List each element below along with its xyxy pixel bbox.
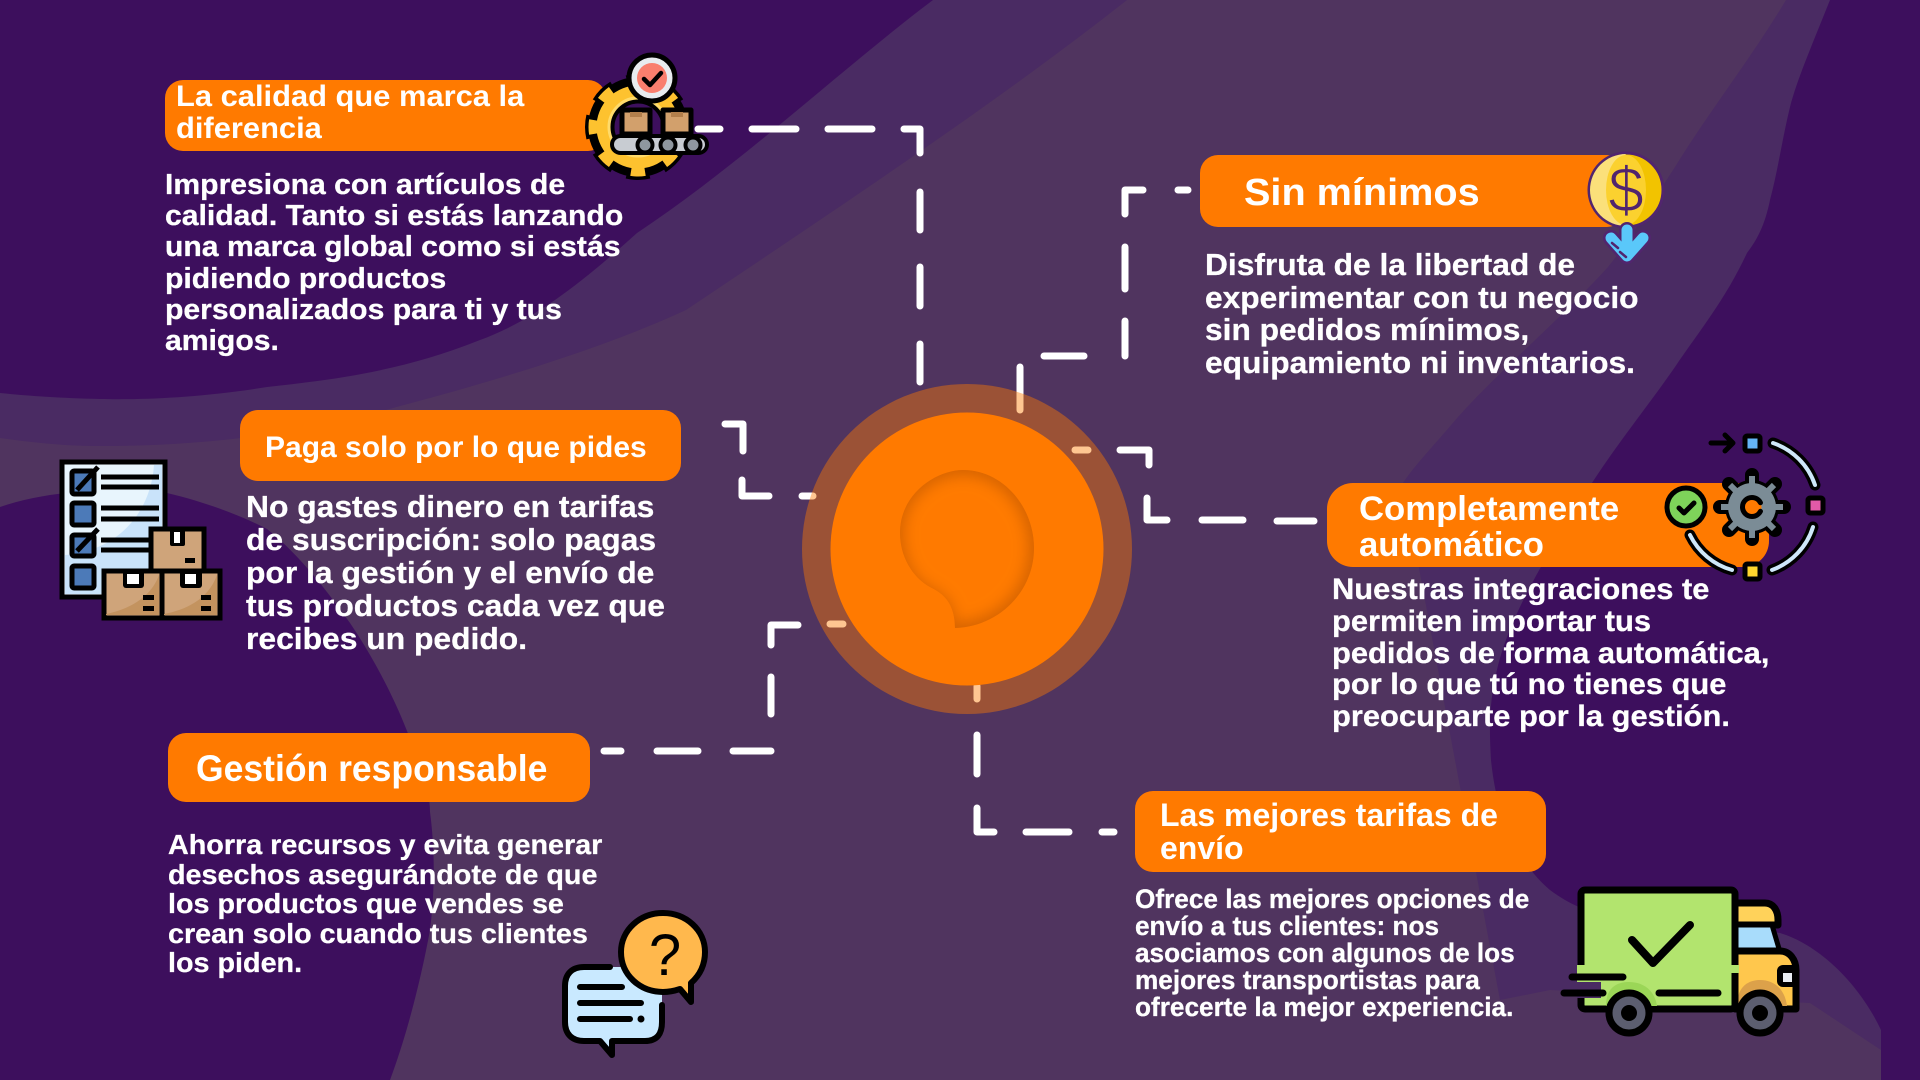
inner disc xyxy=(830,412,1104,686)
body text: crean solo cuando tus clientes xyxy=(168,918,588,949)
icon: chat bubbles: ? xyxy=(649,923,681,988)
connector: calidad to centre xyxy=(694,126,924,386)
heading: Gestión responsable xyxy=(196,748,547,789)
speech bubble mark xyxy=(900,470,1034,628)
body text: pidiendo productos xyxy=(165,263,446,295)
panel: gestion xyxy=(168,733,708,1058)
body text: Ofrece las mejores opciones de xyxy=(1135,884,1529,914)
heading: envío xyxy=(1160,830,1244,866)
body text: equipamiento ni inventarios. xyxy=(1205,345,1635,380)
connector: automatico to centre xyxy=(1072,446,1318,524)
body text: experimentar con tu negocio xyxy=(1205,280,1639,315)
body text: una marca global como si estás xyxy=(165,231,620,263)
icon: checklist and boxes xyxy=(60,460,222,620)
body text xyxy=(1135,884,1529,1022)
icon: conveyor gear xyxy=(585,52,709,180)
body text: mejores transportistas para xyxy=(1135,965,1480,995)
heading: Completamente xyxy=(1359,490,1619,528)
panel: calidad xyxy=(165,52,709,357)
body text: sin pedidos mínimos, xyxy=(1205,312,1529,347)
heading bar xyxy=(168,733,590,802)
icon: delivery truck xyxy=(1560,886,1800,1036)
body text: por la gestión y el envío de xyxy=(246,556,654,590)
heading bar xyxy=(1200,155,1625,227)
body text: No gastes dinero en tarifas xyxy=(246,490,654,524)
body text: permiten importar tus xyxy=(1332,605,1651,638)
connector: sin minimos to centre xyxy=(1016,186,1192,414)
heading: automático xyxy=(1359,526,1544,564)
heading xyxy=(1359,490,1619,564)
body text: pedidos de forma automática, xyxy=(1332,637,1769,670)
connector: tarifas to centre xyxy=(974,684,1118,836)
body text: ofrecerte la mejor experiencia. xyxy=(1135,992,1513,1022)
body text: envío a tus clientes: nos xyxy=(1135,911,1439,941)
body text: de suscripción: solo pagas xyxy=(246,523,656,557)
heading bar xyxy=(165,80,606,151)
heading bar xyxy=(240,410,681,481)
body text: Disfruta de la libertad de xyxy=(1205,247,1575,282)
central logo xyxy=(802,384,1132,714)
heading: Las mejores tarifas de xyxy=(1160,797,1498,833)
body text: tus productos cada vez que xyxy=(246,589,665,623)
icon: coin with down arrow xyxy=(1588,152,1664,264)
heading: La calidad que marca la xyxy=(176,80,524,113)
body text: personalizados para ti y tus xyxy=(165,294,562,326)
heading: Sin mínimos xyxy=(1244,172,1480,214)
body text: Impresiona con artículos de xyxy=(165,169,565,201)
panel: automatico xyxy=(1327,432,1826,733)
heading: diferencia xyxy=(176,112,322,145)
connector: gestion to centre xyxy=(600,620,846,754)
body text: Nuestras integraciones te xyxy=(1332,573,1709,606)
body text xyxy=(1332,573,1769,733)
heading bar xyxy=(1327,483,1769,567)
icon: coin with down arrow: $ xyxy=(1608,154,1644,226)
body text: preocuparte por la gestión. xyxy=(1332,700,1730,733)
body text: por lo que tú no tienes que xyxy=(1332,668,1726,701)
connector: paga solo to centre xyxy=(722,420,816,500)
body text: los productos que vendes se xyxy=(168,888,564,919)
icon: chat bubbles xyxy=(562,910,708,1058)
heading bar xyxy=(1135,791,1546,872)
body text: Ahorra recursos y evita generar xyxy=(168,829,602,860)
panel: sin minimos xyxy=(1200,152,1664,380)
body text xyxy=(246,490,665,656)
icon: automation cycle xyxy=(1664,432,1826,582)
heading xyxy=(1160,797,1498,866)
body text: recibes un pedido. xyxy=(246,622,527,656)
body text: calidad. Tanto si estás lanzando xyxy=(165,200,623,232)
body text: los piden. xyxy=(168,947,302,978)
body text: desechos asegurándote de que xyxy=(168,859,597,890)
panel: tarifas xyxy=(1135,791,1800,1036)
body text xyxy=(165,169,623,357)
body text: asociamos con algunos de los xyxy=(1135,938,1515,968)
heading: Paga solo por lo que pides xyxy=(265,431,647,464)
panel: paga solo xyxy=(60,410,681,656)
outer ring xyxy=(802,384,1132,714)
body text xyxy=(1205,247,1639,380)
body text xyxy=(168,829,602,978)
body text: amigos. xyxy=(165,325,279,357)
heading xyxy=(176,80,524,145)
